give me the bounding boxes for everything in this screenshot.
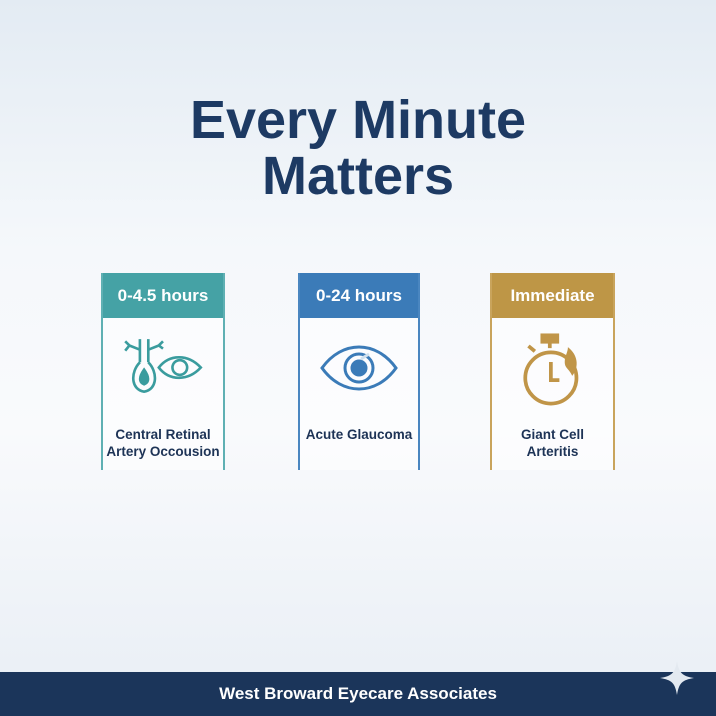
icon: sparkle bbox=[660, 672, 694, 695]
icon: stopwatch bbox=[523, 333, 578, 406]
card: GCA bbox=[490, 273, 615, 470]
icon: artery and eye bbox=[124, 339, 202, 393]
header: 0-4.5 hours bbox=[103, 273, 223, 318]
label: Artery Occousion bbox=[106, 444, 220, 459]
title: Matters bbox=[262, 146, 454, 206]
label: Central Retinal bbox=[115, 427, 211, 442]
label: Arteritis bbox=[527, 444, 578, 459]
label bbox=[106, 427, 220, 459]
header: Immediate: Immediate bbox=[510, 286, 595, 305]
header: 0-24 hours bbox=[300, 273, 418, 318]
card: CRAO bbox=[101, 273, 225, 470]
icon: eye bbox=[320, 346, 398, 390]
header: 0-4.5 hours: 0-4.5 hours bbox=[118, 286, 208, 305]
label bbox=[521, 427, 584, 459]
label: Acute Glaucoma bbox=[306, 427, 412, 442]
header: 0-24 hours: 0-24 hours bbox=[316, 286, 402, 305]
label: Giant Cell bbox=[521, 427, 584, 442]
title: Every Minute bbox=[190, 90, 526, 150]
title bbox=[190, 90, 526, 206]
footer bbox=[0, 672, 716, 716]
header: Immediate bbox=[492, 273, 613, 318]
footer: West Broward Eyecare Associates bbox=[219, 684, 497, 703]
card: glaucoma bbox=[298, 273, 420, 470]
